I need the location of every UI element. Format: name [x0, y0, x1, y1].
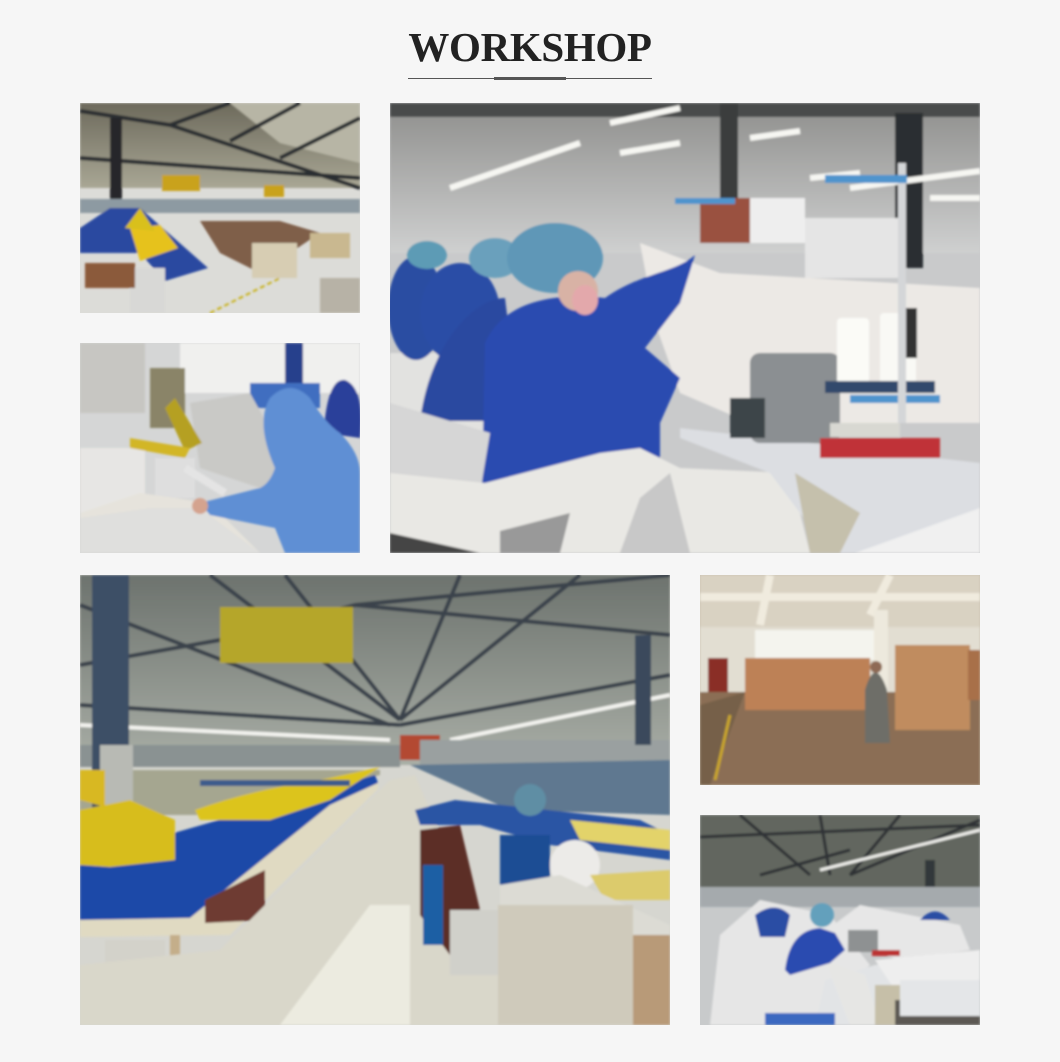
photo: sewing group two hall with yellow garments: [80, 575, 670, 1025]
photo: workshop overview with yellow garments: [80, 103, 360, 313]
photo: warehouse with stacked cartons: [700, 575, 980, 785]
title underline: [408, 77, 652, 80]
title: WORKSHOP: [408, 24, 652, 70]
photo: workers packing white bags: [700, 815, 980, 1025]
photo: seamstress at machine close-up: [390, 103, 980, 553]
photo: machine operator in blue suit: [80, 343, 360, 553]
